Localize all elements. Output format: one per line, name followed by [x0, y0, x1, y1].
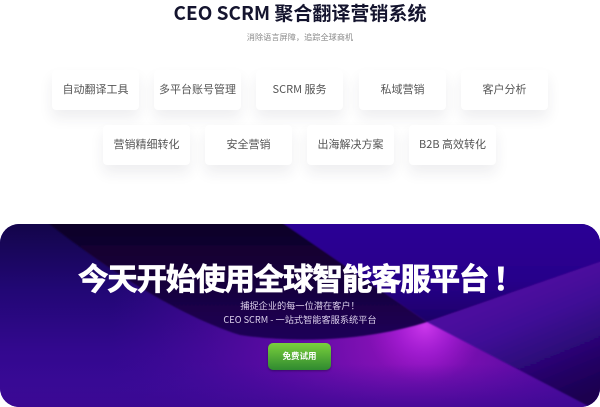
banner background art — [0, 224, 600, 407]
card: auto translate: 自动翻译工具 — [62, 81, 128, 97]
card: SCRM service — [256, 70, 343, 110]
banner subtext: 捕捉企业的每一位潜在客户！ — [240, 298, 360, 312]
card: multi-platform — [154, 70, 241, 110]
card: private marketing: 私域营销 — [380, 81, 424, 97]
card: multi-platform: 多平台账号管理 — [159, 81, 236, 97]
banner headline: 今天开始使用全球智能客服平台！ — [78, 255, 523, 299]
subtitle: 消除语言屏障，追踪全球商机 — [247, 31, 353, 43]
card: customer analysis: 客户分析 — [482, 81, 526, 97]
banner subtext: CEO SCRM - 一站式智能客服系统平台 — [223, 312, 377, 326]
card: secure marketing: 安全营销 — [226, 136, 270, 152]
card: B2B conversion: B2B 高效转化 — [419, 136, 486, 152]
card: overseas solutions — [307, 125, 394, 165]
card: secure marketing — [205, 125, 292, 165]
button: free trial — [268, 343, 331, 370]
card: private marketing — [359, 70, 446, 110]
card: conversion: 营销精细转化 — [114, 136, 180, 152]
card: conversion — [103, 125, 190, 165]
panel: feature cards — [53, 81, 547, 173]
card: auto translate — [52, 70, 139, 110]
card: SCRM service: SCRM 服务 — [273, 81, 326, 97]
button: free trial: 免费试用 — [282, 350, 316, 362]
panel: call to action banner — [0, 224, 600, 407]
card: overseas solutions: 出海解决方案 — [318, 136, 384, 152]
banner subtext — [223, 298, 377, 326]
card: B2B conversion — [409, 125, 496, 165]
card: customer analysis — [461, 70, 548, 110]
